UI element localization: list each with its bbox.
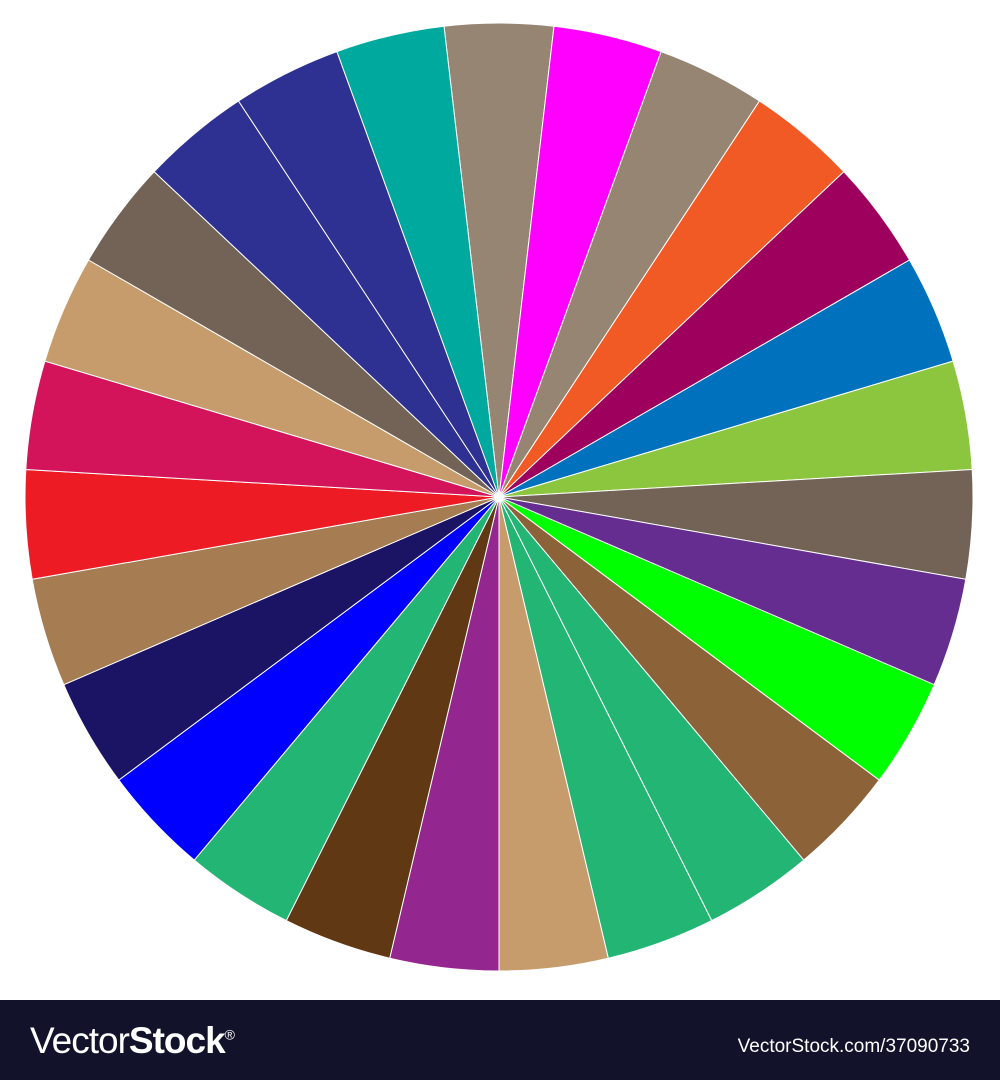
image url: VectorStock.com/37090733 — [738, 1036, 970, 1057]
footer banner — [0, 1000, 1000, 1080]
logo text: VectorStock® — [30, 1020, 234, 1061]
